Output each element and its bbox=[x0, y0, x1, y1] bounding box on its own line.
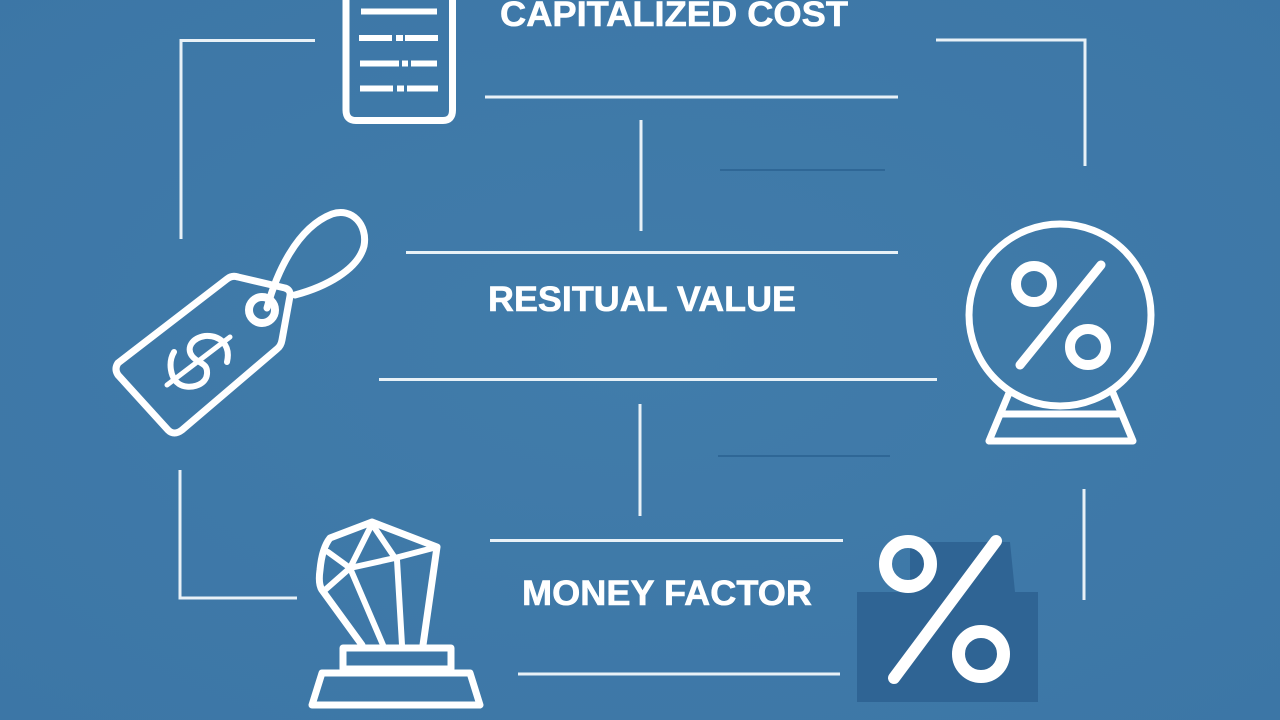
icon: price tag bbox=[116, 212, 365, 433]
heading: residual value: RESITUAL VALUE bbox=[488, 280, 796, 319]
icon: crystal ball percent bbox=[969, 224, 1151, 441]
icon: dollar sign bbox=[167, 336, 230, 387]
heading: money factor: MONEY FACTOR bbox=[522, 574, 812, 613]
icon: document bbox=[346, 0, 452, 120]
frame brackets and divider lines bbox=[180, 40, 1085, 674]
icon: diamond trophy bbox=[312, 522, 480, 705]
icon: percent on dark square bbox=[857, 541, 1038, 702]
faint short lines bbox=[718, 170, 890, 456]
